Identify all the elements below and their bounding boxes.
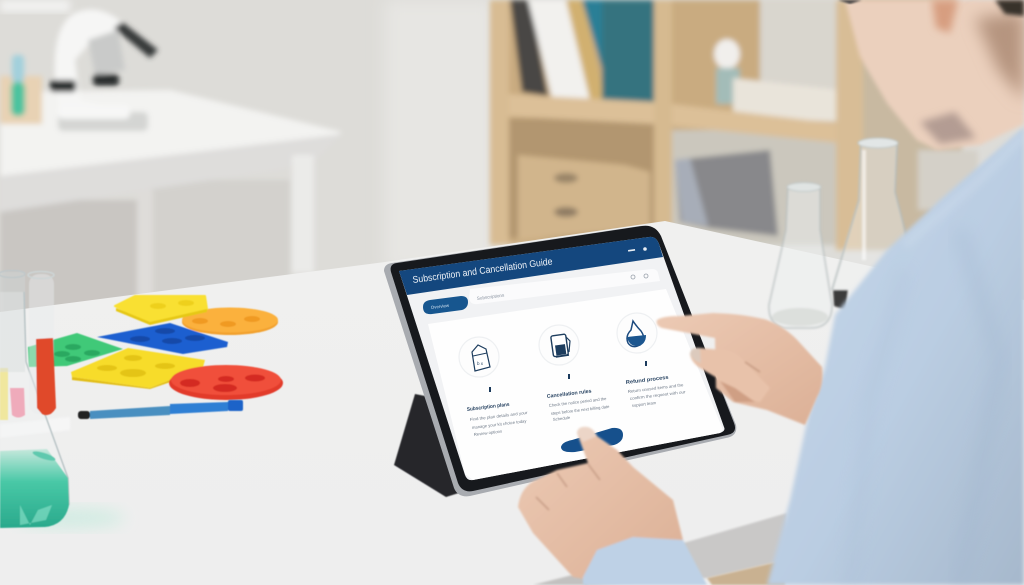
- ear: [932, 0, 958, 33]
- tab button: [423, 296, 468, 314]
- small sample rack: [0, 76, 42, 124]
- tablet screen: Subscriptions: [477, 293, 505, 301]
- step 2: [539, 325, 610, 422]
- red test tube: [28, 272, 56, 415]
- person shirt: [767, 127, 1024, 585]
- second leg: [137, 190, 153, 310]
- microscope stage: [50, 80, 76, 92]
- microscope arm: [55, 9, 125, 118]
- description: Review options: [474, 429, 502, 437]
- palm and index finger: [657, 313, 822, 425]
- description: [549, 396, 610, 422]
- bench leg: [292, 155, 314, 273]
- action button: [561, 428, 623, 452]
- header icons: [628, 247, 647, 252]
- test tubes and flask: [0, 270, 70, 528]
- icon: water drop: [617, 313, 657, 353]
- tablet screen: Overview: [431, 303, 450, 310]
- microscope head: [114, 22, 158, 58]
- books: [510, 0, 548, 96]
- tablet: [384, 226, 736, 497]
- person head and neck: [838, 0, 1024, 150]
- shelf boards: [503, 94, 840, 143]
- description: Return unused items and the: [628, 382, 684, 394]
- stand: [0, 417, 70, 438]
- icon: bottle: [539, 325, 579, 365]
- step 3: [617, 313, 686, 408]
- icon: carton: b x: [477, 361, 484, 366]
- grey folder: [675, 150, 778, 236]
- description: Schedule: [553, 415, 571, 422]
- hair: [975, 12, 1024, 100]
- pink and yellow tubes: [0, 270, 25, 420]
- under-bench shadow: [0, 200, 140, 325]
- microscope base: [58, 112, 148, 131]
- pointing hand: [657, 313, 822, 425]
- background microscope and side bench: [0, 9, 342, 325]
- tray: front yellow: [71, 348, 205, 389]
- description: confirm the request with our: [630, 389, 686, 401]
- sleeve: [583, 537, 707, 585]
- lower hand and sleeve: [518, 427, 707, 585]
- description: steps before the next billing date: [551, 404, 610, 416]
- description: manage your kit choice today: [472, 418, 528, 430]
- content card: [428, 289, 723, 480]
- flask right short: [769, 182, 832, 328]
- clear flasks: [769, 138, 910, 328]
- tray: red disc: [169, 365, 283, 400]
- description: support team: [632, 400, 657, 408]
- tablet screen: [399, 237, 724, 480]
- description: Find the plan details and your: [470, 410, 528, 422]
- header bar: [399, 237, 663, 295]
- label: Refund process: [626, 375, 669, 386]
- science trays: [28, 296, 283, 400]
- description: [628, 382, 686, 408]
- search bar: [469, 269, 660, 304]
- label: Cancellation rules: [547, 389, 592, 400]
- shelf ornaments: [714, 39, 740, 69]
- description: Check the notice period and the: [549, 396, 607, 408]
- hand: [518, 427, 683, 580]
- label: Subscription plans: [467, 402, 510, 413]
- storage boxes: [518, 155, 650, 240]
- table front face: [580, 513, 787, 585]
- tablet silver edge: [384, 226, 736, 496]
- tray: blue: [97, 323, 228, 354]
- flask right tall: [832, 138, 910, 310]
- bookshelf: [490, 0, 978, 250]
- step 1: [459, 337, 528, 437]
- description: [470, 410, 528, 437]
- tablet stand: [394, 394, 462, 497]
- tray: green: [28, 333, 123, 367]
- green flask: [0, 292, 69, 528]
- second finger: [690, 348, 770, 402]
- blue pen: [78, 400, 243, 419]
- tablet bezel: [391, 226, 735, 491]
- tray: back yellow: [115, 296, 207, 325]
- main white table: [0, 221, 1024, 585]
- title: Subscription and Cancellation Guide: [412, 256, 553, 286]
- side bench top: [0, 90, 342, 176]
- neck shadow: [920, 112, 976, 144]
- tray: back orange disc: [182, 308, 278, 335]
